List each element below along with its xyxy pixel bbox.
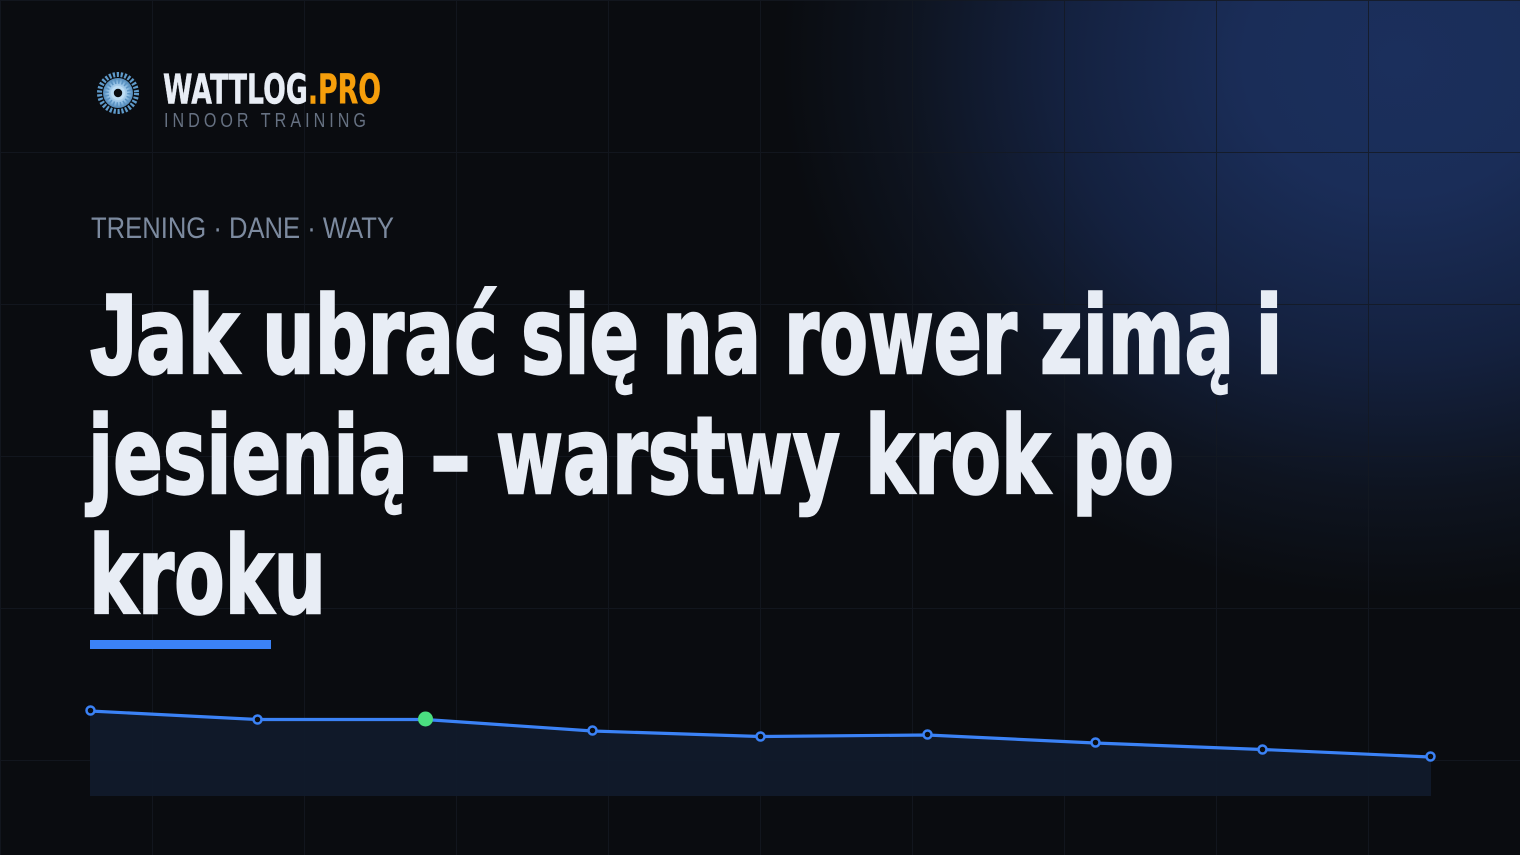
brand name: WATTLOG.PRO — [163, 66, 381, 114]
title: kroku — [89, 515, 326, 639]
data points — [86, 706, 1434, 760]
logo — [100, 66, 381, 132]
title: – — [430, 395, 471, 519]
title: Jak — [91, 272, 241, 399]
title: po — [1072, 395, 1174, 519]
chart line — [90, 711, 1430, 757]
title underline — [90, 640, 271, 649]
category label: TRENING · DANE · WATY — [91, 212, 394, 245]
title: się — [521, 275, 639, 399]
title: warstwy — [496, 395, 840, 519]
title: zimą — [1040, 275, 1234, 399]
chart area fill — [90, 711, 1431, 796]
tagline: INDOOR TRAINING — [164, 110, 370, 132]
highlighted point — [418, 712, 433, 726]
title: rower — [784, 275, 1017, 399]
title: i — [1255, 275, 1283, 399]
title: krok — [865, 395, 1052, 519]
title: jesienią — [85, 395, 408, 519]
title: ubrać — [262, 275, 498, 399]
icon: cassette gear — [100, 74, 136, 112]
title — [85, 272, 1283, 639]
line chart — [86, 706, 1434, 796]
title: na — [662, 275, 761, 399]
